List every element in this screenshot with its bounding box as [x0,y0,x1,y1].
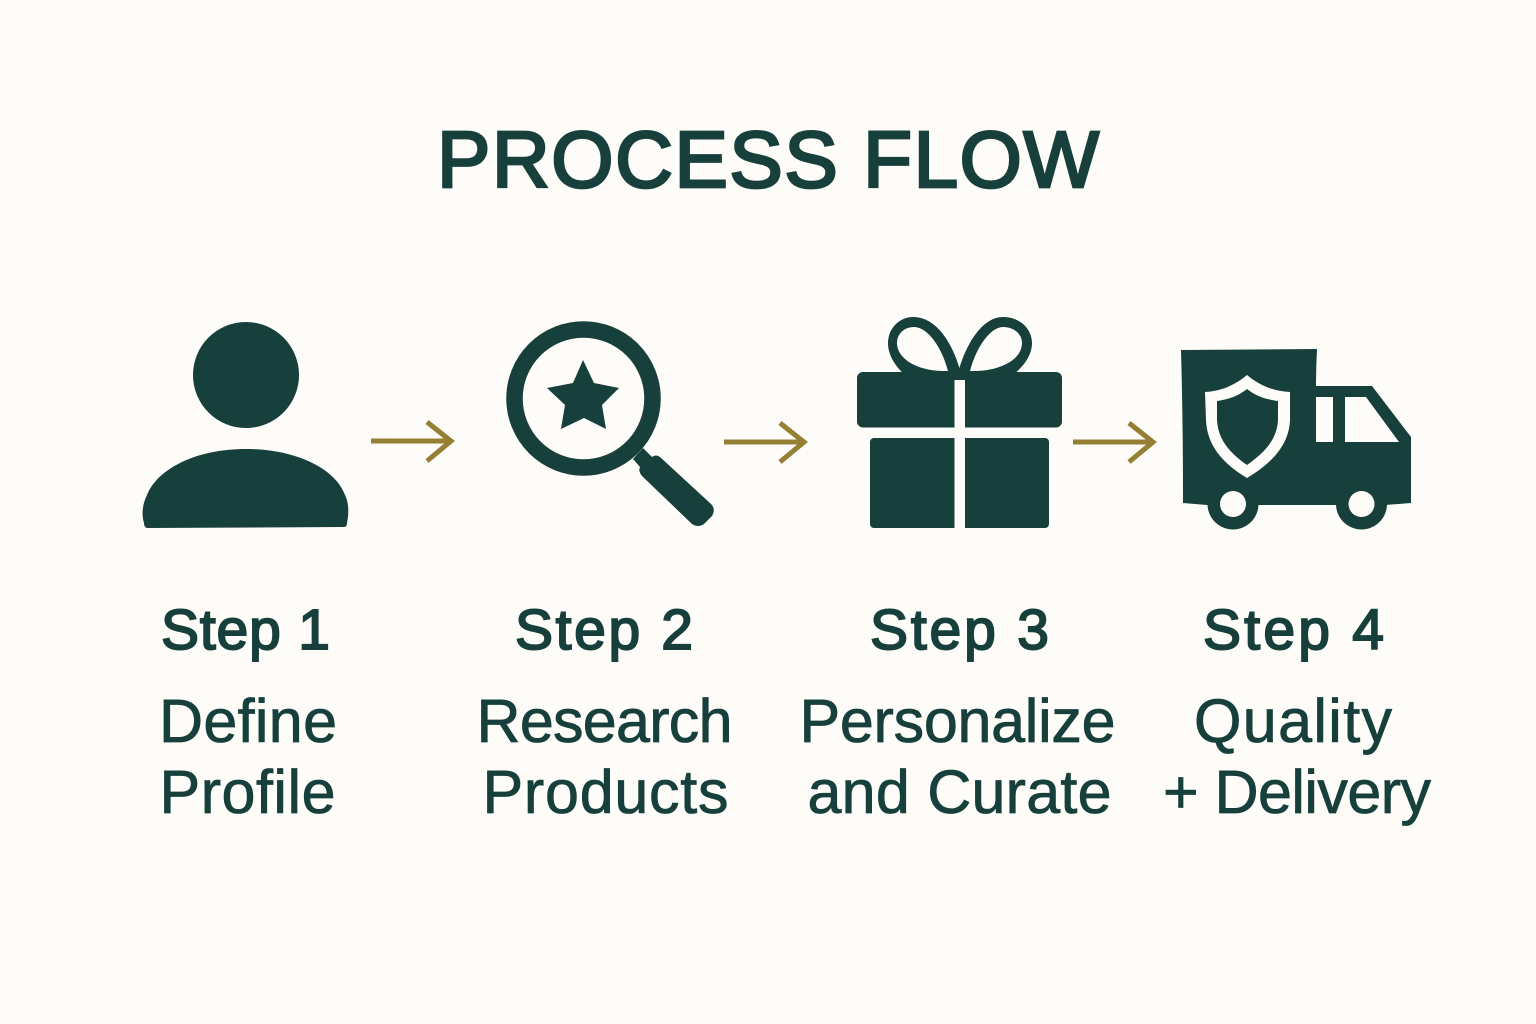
arrow: step 3 to step 4 [1073,423,1153,462]
text: define profile: Profile [160,758,336,826]
icon: person [143,322,348,528]
text: define profile [159,687,337,826]
heading: step 4: Step 4 [1203,598,1384,662]
text: personalize and curate: Personalize [800,687,1116,755]
heading: step 3: Step 3 [870,598,1049,662]
title: PROCESS FLOW [437,115,1099,204]
text: quality + delivery: + Delivery [1163,758,1432,826]
icon: gift box [857,317,1062,530]
text: research products: Products [482,758,728,826]
heading: step 1: Step 1 [161,598,330,662]
arrow: step 2 to step 3 [724,423,804,462]
icon: delivery truck with shield [1181,349,1411,530]
text: quality + delivery: Quality [1194,687,1392,755]
arrow: step 1 to step 2 [371,422,451,461]
text: personalize and curate [800,687,1116,826]
text: research products: Research [476,687,732,755]
text: research products [476,687,732,826]
text: define profile: Define [159,687,337,755]
icon: magnifier with star [514,330,714,526]
text: quality + delivery [1163,687,1432,826]
heading: step 2: Step 2 [515,598,693,662]
text: personalize and curate: and Curate [808,758,1112,826]
